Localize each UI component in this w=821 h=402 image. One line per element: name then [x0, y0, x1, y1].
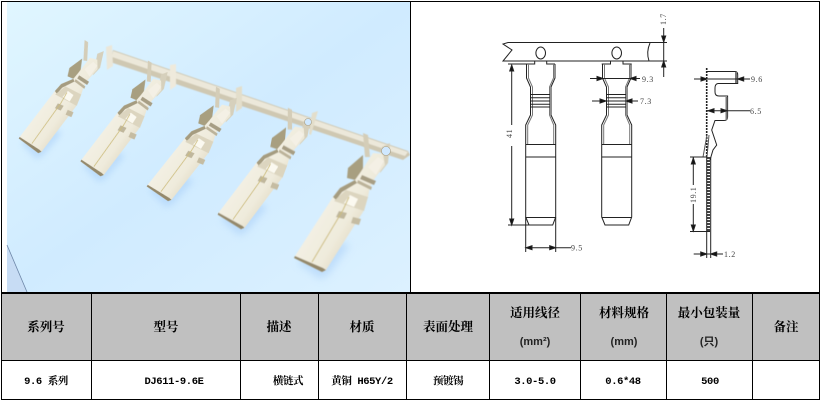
- dimension 7.3: 7.3: [640, 97, 652, 106]
- dimension 9.6: [694, 75, 763, 84]
- terminal 1: [16, 33, 105, 166]
- dimension 6.5: [707, 107, 762, 116]
- photo background: [7, 2, 410, 293]
- dimension 6.5: 6.5: [750, 107, 762, 116]
- table rules: [1, 292, 820, 400]
- header: material spec: 材料规格: [599, 306, 649, 320]
- dimension 9.5: 9.5: [571, 244, 583, 252]
- cell: surface value: 预镀锡: [433, 376, 463, 388]
- front view terminal right: [602, 64, 632, 225]
- terminal 2: [78, 54, 169, 189]
- front view terminal left: [526, 64, 556, 225]
- strip outline: [503, 42, 667, 64]
- cell: wire gauge value: 3.0-5.0: [514, 376, 556, 388]
- header: material: 材质: [349, 320, 375, 334]
- cell: model value: DJ611-9.6E: [144, 376, 204, 388]
- header: surface treatment: 表面处理: [423, 320, 473, 334]
- table edge shadow corner: [7, 245, 27, 293]
- dimension 9.6: 9.6: [751, 75, 763, 84]
- strip pilot holes: [304, 118, 390, 156]
- dimension 1.7: 1.7: [659, 13, 668, 25]
- dimension 1.7: [659, 13, 668, 77]
- cell: description value: 横链式: [273, 376, 303, 388]
- cell: material value: 黄铜 H65Y/2: [331, 376, 393, 388]
- dimension 41: [505, 65, 529, 225]
- dimension 9.3: 9.3: [642, 75, 654, 84]
- panel outer frame: [1, 1, 820, 293]
- header: series: 系列号: [27, 320, 65, 334]
- header: wire gauge unit: (mm²): [520, 336, 550, 348]
- panel: dimension drawing: [502, 13, 763, 259]
- header: model: 型号: [153, 320, 179, 334]
- terminal 4: [216, 102, 311, 241]
- table of specifications: [1, 292, 820, 400]
- header: minimum package: 最小包装量: [678, 306, 740, 320]
- side view terminal: [703, 68, 738, 258]
- terminal 5: [294, 133, 390, 279]
- dimension 1.2: [694, 250, 736, 259]
- panel: product photo of terminal strip: [6, 2, 410, 292]
- dimension 9.3: [590, 75, 654, 84]
- dimension 1.2: 1.2: [724, 250, 736, 259]
- dimension 7.3: [592, 97, 652, 106]
- header: remarks: 备注: [773, 320, 799, 334]
- carrier strip: [106, 45, 410, 160]
- header: material spec unit: (mm): [611, 336, 637, 348]
- dimension 19.1: [689, 157, 710, 232]
- cell: series value: 9.6 系列: [24, 376, 68, 388]
- table header background: [1, 294, 820, 360]
- dimension 19.1: 19.1: [689, 187, 698, 203]
- header: description: 描述: [266, 320, 292, 334]
- terminal 3: [145, 80, 238, 214]
- dimension 9.5: [526, 217, 583, 252]
- dimension 41: 41: [505, 129, 514, 138]
- header: wire gauge: 适用线径: [510, 306, 560, 320]
- header: minimum package unit: (只): [700, 336, 718, 348]
- cell: material spec value: 0.6*48: [605, 376, 641, 388]
- cell: package value: 500: [701, 376, 719, 388]
- panel divider: [410, 1, 411, 293]
